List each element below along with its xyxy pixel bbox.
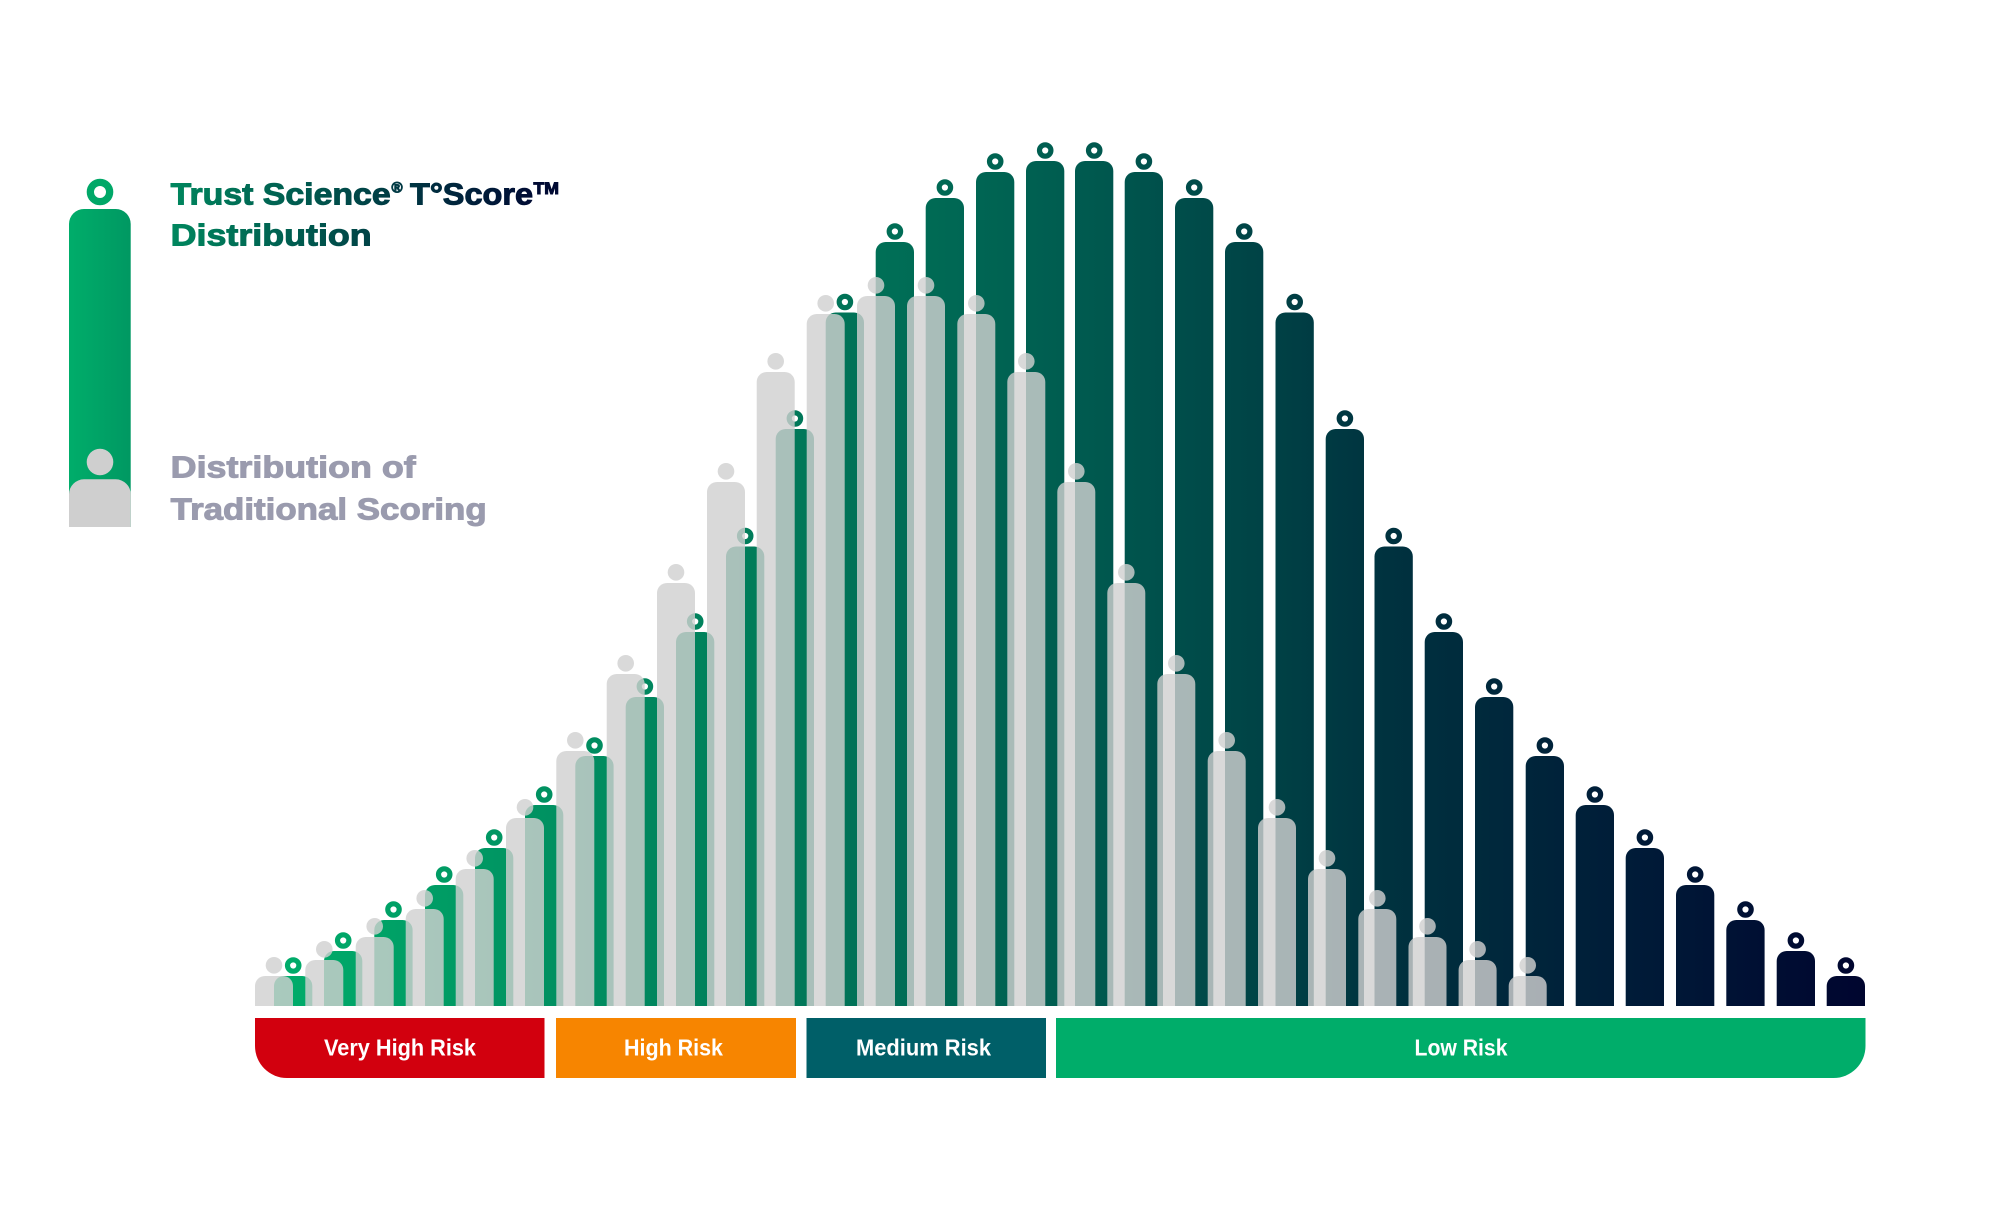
legend heading: traditional scoring: Traditional Scoring <box>171 491 487 526</box>
legend heading: T-Score distribution <box>171 177 559 252</box>
risk band: low risk: Low Risk <box>1414 1034 1508 1060</box>
risk band: high risk <box>556 1018 796 1078</box>
legend: icon key <box>69 182 131 527</box>
legend heading: traditional scoring <box>171 450 487 526</box>
chart: T-Score ring heads <box>288 145 1852 971</box>
legend heading: T-Score distribution: Distribution <box>171 218 372 252</box>
risk band: medium risk: Medium Risk <box>856 1034 991 1060</box>
legend heading: T-Score distribution: Trust Science <box>171 177 391 212</box>
icon: traditional scoring person <box>69 449 131 527</box>
legend heading: T-Score distribution: TM <box>534 179 559 198</box>
legend heading: T-Score distribution: T°Score <box>410 177 533 212</box>
risk band: low risk <box>1056 1018 1866 1078</box>
icon: T-Score person <box>69 182 131 527</box>
legend heading: traditional scoring: Distribution of <box>171 450 416 484</box>
chart: traditional scoring heads <box>266 277 1536 974</box>
risk band: high risk: High Risk <box>624 1034 723 1060</box>
risk band: very high risk <box>255 1018 544 1078</box>
chart: T-Score distribution bars <box>274 161 1865 1006</box>
chart: traditional scoring bars <box>255 296 1547 1006</box>
risk band: medium risk <box>806 1018 1046 1078</box>
legend heading: T-Score distribution: ® <box>392 180 403 196</box>
risk band: very high risk: Very High Risk <box>324 1034 476 1060</box>
